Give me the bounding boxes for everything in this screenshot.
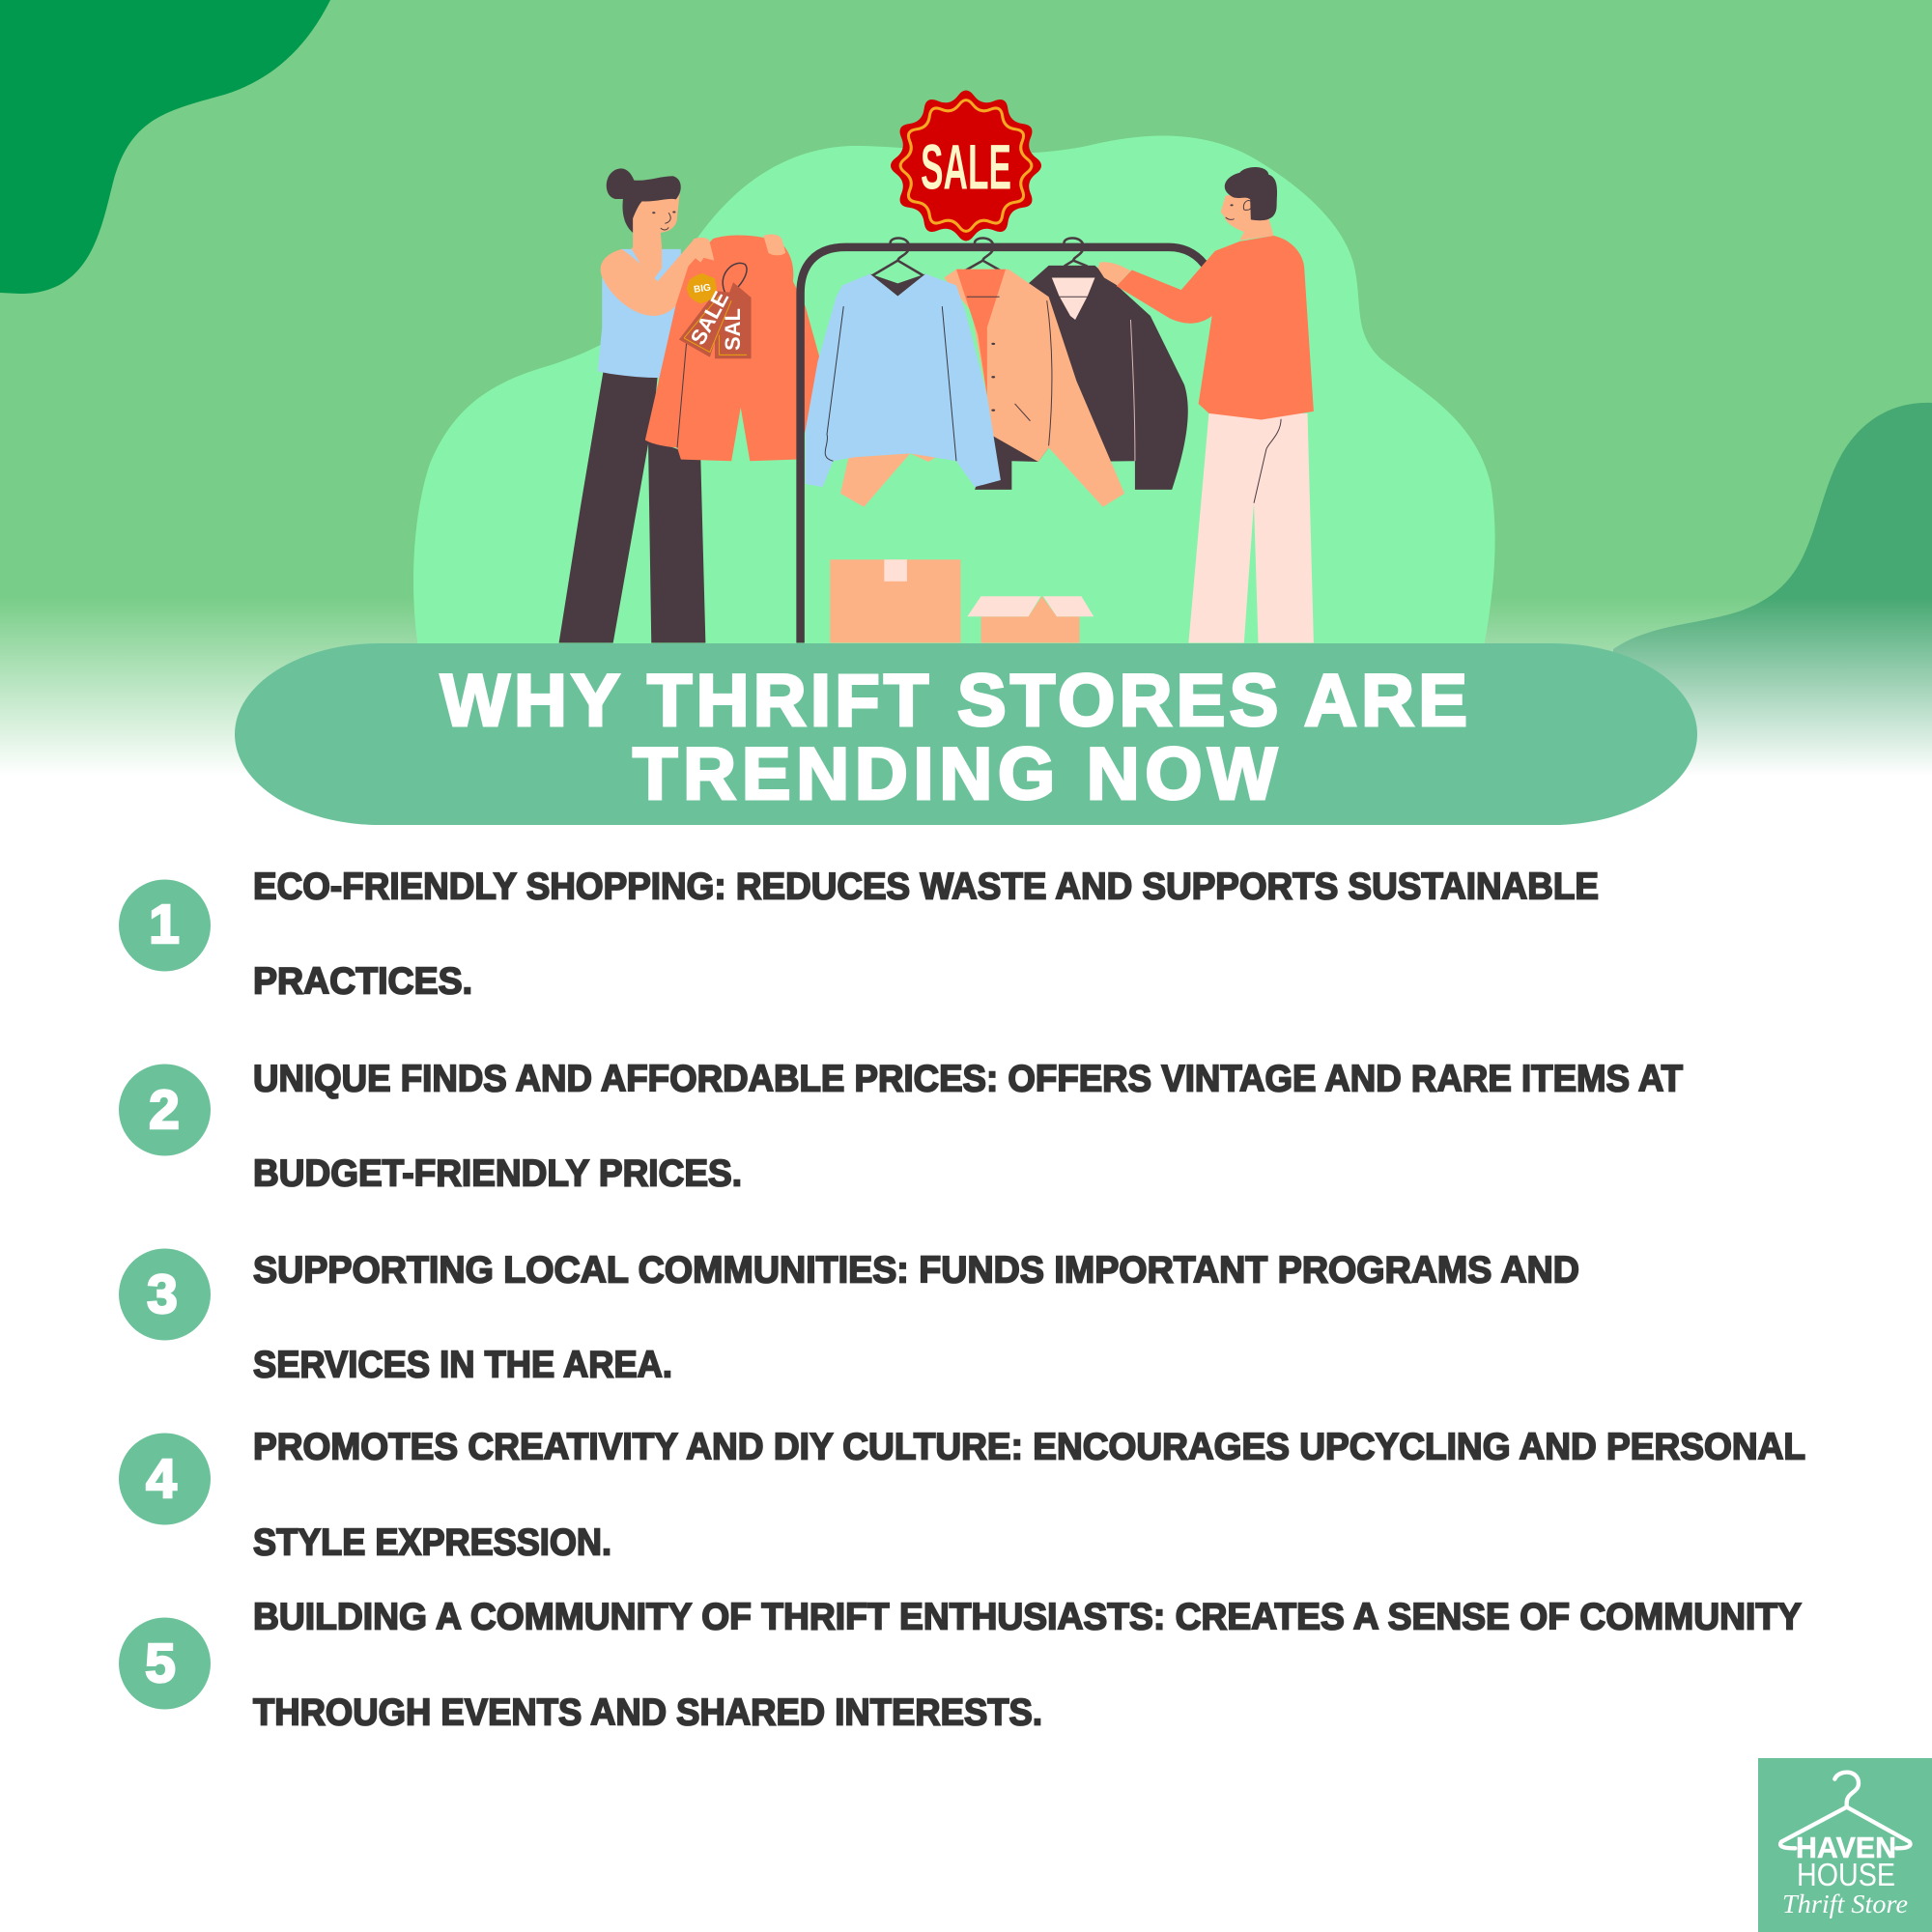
item 3	[119, 1248, 1579, 1385]
woman: face details	[626, 207, 670, 230]
item 3: 3	[147, 1264, 178, 1325]
big badge	[687, 273, 717, 303]
peach under-layer	[840, 453, 910, 507]
item 4: PROMOTES CREATIVITY AND DIY CULTURE: ENCOURAGES UPCYCLING AND PERSONAL	[253, 1426, 1805, 1468]
big box tape	[884, 559, 907, 582]
tag text: BIG: BIG	[693, 282, 712, 296]
peach jacket	[944, 270, 1124, 507]
item 1	[119, 866, 1599, 1003]
dark jacket	[975, 266, 1188, 490]
corner blob: top left	[0, 0, 330, 294]
logo: HAVEN: HAVEN	[1796, 1831, 1896, 1864]
item 1: ECO-FRIENDLY SHOPPING: REDUCES WASTE AND SUPPORTS SUSTAINABLE	[253, 866, 1599, 908]
item 4: 4	[146, 1448, 177, 1510]
item 2: UNIQUE FINDS AND AFFORDABLE PRICES: OFFERS VINTAGE AND RARE ITEMS AT	[253, 1059, 1683, 1099]
logo: Haven House Thrift Store	[1758, 1758, 1932, 1932]
small box	[980, 596, 1080, 642]
woman: neck and face	[624, 193, 680, 282]
title: TRENDING NOW	[633, 733, 1277, 815]
orange inner shirt	[956, 270, 1006, 396]
item 2: BUDGET-FRIENDLY PRICES.	[253, 1153, 742, 1194]
item 2	[119, 1059, 1683, 1194]
item 2: 2	[149, 1079, 180, 1141]
jacket details	[967, 297, 1089, 445]
item 4	[119, 1426, 1805, 1563]
logo: hanger icon	[1780, 1773, 1911, 1848]
woman: pants	[559, 371, 705, 642]
jacket light seam	[1130, 320, 1135, 461]
man: hand	[1098, 262, 1130, 285]
logo: Thrift Store: Thrift Store	[1782, 1889, 1908, 1918]
item 3: SERVICES IN THE AREA.	[253, 1345, 672, 1385]
orange garment	[645, 236, 821, 461]
item 5: 5	[145, 1633, 176, 1694]
item 1: PRACTICES.	[253, 960, 472, 1003]
item 5: BUILDING A COMMUNITY OF THRIFT ENTHUSIASTS: CREATES A SENSE OF COMMUNITY	[253, 1596, 1802, 1638]
corner blob: right	[1613, 403, 1932, 869]
woman: hands	[763, 235, 785, 255]
big box	[830, 559, 960, 642]
title: WHY THRIFT STORES ARE	[440, 660, 1467, 742]
tag text: SAL: SAL	[721, 308, 745, 351]
title	[440, 660, 1467, 815]
green background	[0, 0, 1932, 869]
item 5	[119, 1596, 1802, 1733]
light green blob behind illustration	[413, 135, 1495, 647]
item 4: STYLE EXPRESSION.	[253, 1522, 611, 1563]
man: face details	[1226, 201, 1252, 219]
item 1: 1	[149, 894, 180, 955]
blue sweater	[806, 274, 1001, 487]
badge inner outline	[900, 100, 1032, 231]
small box flaps	[967, 596, 1094, 616]
sweater collar	[870, 274, 925, 296]
garment seam	[677, 343, 687, 447]
white fade	[0, 597, 1932, 1932]
man: shirt	[1117, 236, 1314, 420]
woman: arm	[601, 239, 713, 316]
tag text: SALE: SALE	[686, 287, 733, 349]
clothing rack	[801, 247, 1208, 642]
logo: HOUSE: HOUSE	[1797, 1857, 1895, 1892]
sale tags	[723, 263, 747, 293]
badge text: SALE	[921, 131, 1011, 203]
tag borders	[684, 296, 747, 355]
sale badge	[891, 90, 1041, 242]
woman: tank top	[598, 249, 681, 378]
sweater details	[825, 306, 956, 461]
title banner	[235, 643, 1697, 825]
woman: hair	[607, 168, 681, 233]
man: pants	[1188, 413, 1314, 642]
item 5: THROUGH EVENTS AND SHARED INTERESTS.	[253, 1692, 1042, 1733]
illustration: shoppers and clothing rack	[559, 167, 1314, 642]
man: hair	[1225, 167, 1277, 220]
badge shape	[891, 90, 1041, 242]
hangers	[872, 239, 1088, 275]
item 3: SUPPORTING LOCAL COMMUNITIES: FUNDS IMPORTANT PROGRAMS AND	[253, 1250, 1579, 1291]
man: head and neck	[1221, 192, 1273, 241]
dark jacket: inner shirt	[1052, 277, 1094, 320]
